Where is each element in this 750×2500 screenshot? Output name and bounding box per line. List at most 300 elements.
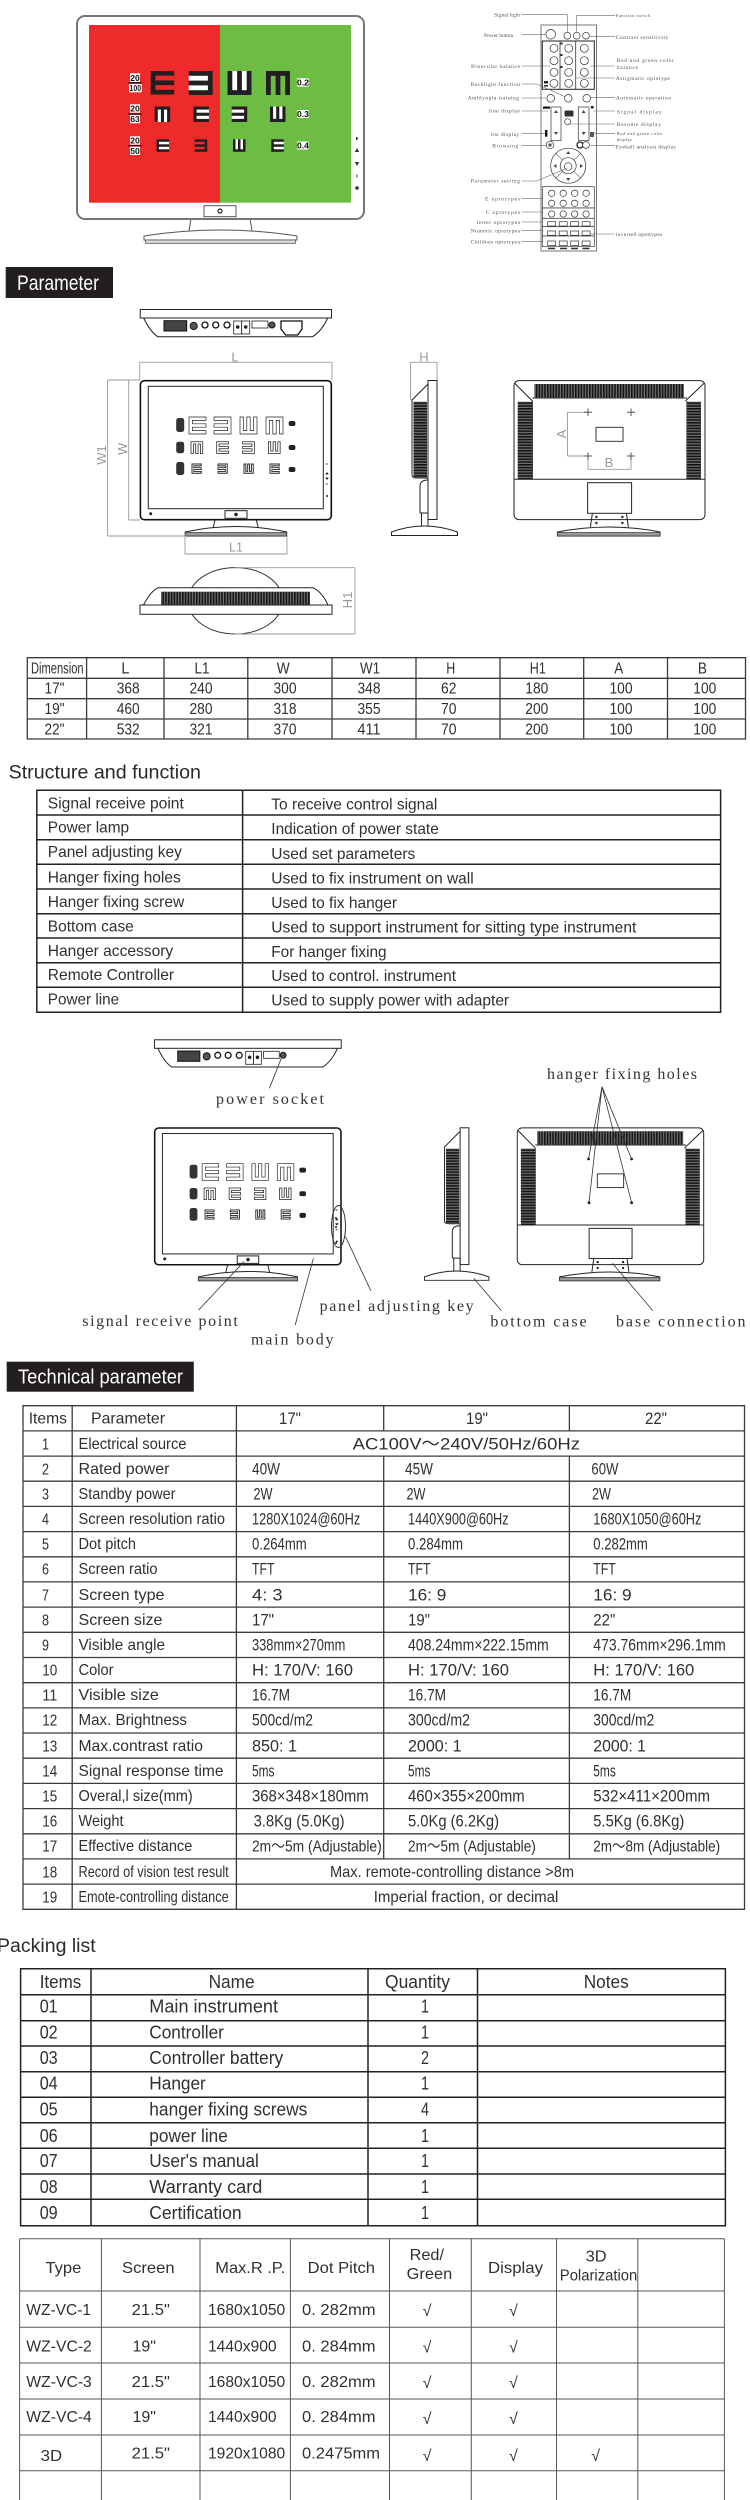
row 22 inch: 321	[190, 722, 213, 738]
structure names: Bottom case	[48, 918, 134, 936]
row 22 inch: 532	[117, 722, 140, 738]
dimension line: H1	[235, 568, 355, 634]
model table header: Max.R .P.	[215, 2260, 285, 2277]
row 19 inch: 460	[117, 701, 140, 718]
dimension line: H	[410, 350, 437, 400]
item numbers: 16	[42, 1814, 57, 1830]
19 inch values: TFT	[408, 1560, 430, 1578]
dimension lines: L W W1 L1: L1	[229, 540, 243, 554]
dimension lines: L W W1 L1: W1	[94, 445, 109, 465]
packing item names: power line	[149, 2126, 228, 2146]
leader lines for structure labels	[199, 1058, 653, 1325]
structure names: Signal receive point	[48, 796, 184, 812]
drawing: structure side view	[424, 1128, 489, 1280]
item numbers: 3	[42, 1486, 49, 1504]
check marks: √	[423, 2303, 432, 2320]
section tag: Technical parameter: Technical parameter	[18, 1366, 183, 1388]
packing quantities: 4	[421, 2100, 429, 2120]
parameter names	[78, 1436, 229, 1906]
table header row: W1	[360, 660, 380, 678]
item numbers: 1	[42, 1436, 49, 1454]
parameter names: Weight	[78, 1813, 124, 1830]
check marks: √	[423, 2375, 432, 2392]
drawing: structure rear port view	[154, 1040, 341, 1067]
decimal labels: 0.3	[297, 109, 309, 119]
17 inch values: 2W	[254, 1484, 272, 1504]
row 22 inch: 200	[525, 722, 548, 738]
packing item names: Warranty card	[149, 2177, 262, 2197]
function descriptions: To receive control signal	[271, 796, 437, 814]
row 22 inch: 370	[274, 722, 297, 738]
17 inch values	[252, 1460, 382, 1856]
function descriptions	[271, 796, 637, 1010]
function descriptions: Used to control. instrument	[271, 968, 457, 985]
row 17 inch: 300	[274, 680, 297, 698]
remote left labels: Browsing	[492, 144, 519, 150]
item numbers: 8	[42, 1612, 49, 1630]
label: bottom case: bottom case	[490, 1314, 587, 1331]
model table header: Green	[407, 2266, 452, 2283]
model table header	[46, 2247, 637, 2284]
row 17 inch: 100	[693, 680, 716, 698]
structure names: Panel adjusting key	[48, 844, 182, 861]
section tag: Parameter: Parameter	[17, 272, 99, 295]
model rows: 1920x1080	[208, 2446, 285, 2462]
row 19 inch: 19"	[44, 701, 64, 718]
packing item numbers: 07	[40, 2151, 58, 2171]
17 inch values: 850: 1	[252, 1736, 297, 1756]
17 inch values: 338mm×270mm	[252, 1636, 345, 1654]
row 17 inch: 17"	[44, 680, 64, 698]
function descriptions: Used to supply power with adapter	[271, 992, 510, 1010]
check marks: √	[509, 2340, 518, 2356]
function descriptions: For hanger fixing	[271, 944, 387, 961]
optotype row one	[151, 71, 290, 95]
item numbers: 14	[42, 1764, 57, 1780]
model rows	[26, 2302, 380, 2465]
17 inch values: 16.7M	[252, 1686, 290, 1704]
packing quantities	[421, 1997, 429, 2223]
item numbers: 2	[42, 1462, 49, 1478]
remote left labels: Power button	[484, 33, 514, 39]
row 19 inch: 318	[274, 701, 297, 718]
dimension lines: L W W1 L1	[94, 350, 332, 554]
power indicator box	[204, 206, 236, 217]
table header row: W	[277, 660, 291, 678]
remote left labels: Numeric optotypes	[471, 228, 520, 234]
17 inch values: 368×348×180mm	[252, 1786, 369, 1806]
22 inch values: 1680X1050@60Hz	[593, 1510, 701, 1528]
item numbers: 12	[42, 1712, 57, 1730]
item numbers: 17	[42, 1838, 57, 1856]
structure names: Hanger fixing holes	[48, 870, 181, 886]
17 inch values: 17"	[252, 1610, 274, 1630]
remote left labels: Parameter setting	[471, 179, 520, 185]
function descriptions: Used set parameters	[271, 846, 415, 863]
remote left labels: Backlight function	[471, 81, 520, 88]
model table header: Red/	[410, 2247, 445, 2264]
model rows: 1440x900	[208, 2409, 277, 2426]
decimal labels: 0.2	[297, 78, 309, 88]
parameter names: Record of vision test result	[78, 1864, 229, 1881]
fraction labels: 20	[130, 136, 140, 146]
model rows: 21.5"	[132, 2374, 170, 2391]
parameter names: Emote-controlling distance	[78, 1889, 229, 1906]
22 inch values: 2W	[592, 1484, 611, 1504]
remote right labels	[616, 13, 676, 238]
packing item names: Controller	[149, 2023, 224, 2043]
drawing: dimensions front view	[140, 381, 331, 536]
17 inch values: 1280X1024@60Hz	[252, 1510, 360, 1528]
row 17 inch: 62	[441, 680, 457, 698]
remote left labels: letter optotypes	[477, 220, 520, 226]
fraction labels: 20	[130, 104, 140, 114]
19 inch values: 408.24mm×222.15mm	[408, 1636, 549, 1654]
label: base connection: base connection	[616, 1314, 746, 1331]
row 19 inch: 100	[610, 701, 633, 718]
remote right labels: Red and green color	[617, 131, 663, 136]
row 19 inch: 355	[358, 701, 381, 718]
monitor stand	[144, 218, 297, 243]
header row: 19"	[466, 1409, 488, 1428]
22 inch values: 22"	[593, 1610, 615, 1630]
19 inch values: 16.7M	[408, 1686, 446, 1704]
packing quantities: 1	[421, 2203, 429, 2223]
drawing: structure back view	[517, 1128, 704, 1281]
dimension lines: L W W1 L1: L	[231, 350, 239, 364]
item numbers: 18	[42, 1864, 57, 1882]
table header row: L	[121, 660, 129, 678]
drawing: dimensions side view	[392, 380, 458, 536]
model rows: WZ-VC-4	[26, 2409, 92, 2426]
row 19 inch	[44, 701, 716, 718]
check marks: √	[509, 2375, 518, 2392]
model rows: 21.5"	[132, 2302, 170, 2319]
19 inch values: 5.0Kg (6.2Kg)	[408, 1812, 499, 1830]
label: signal receive point: signal receive point	[82, 1313, 238, 1330]
parameter names: Rated power	[78, 1461, 170, 1478]
packing item numbers: 09	[40, 2203, 58, 2223]
remote right labels: Red and green color	[617, 58, 674, 64]
packing quantities: 1	[421, 2177, 429, 2197]
22 inch values	[591, 1460, 726, 1856]
row 17 inch: 348	[358, 680, 381, 698]
row 17 inch: 240	[190, 680, 213, 698]
parameter names: Visible size	[78, 1687, 159, 1704]
row 17 inch: 180	[525, 680, 548, 698]
check marks: √	[423, 2340, 432, 2356]
parameter names: Max.contrast ratio	[78, 1738, 203, 1755]
row 17 inch: 100	[610, 680, 633, 698]
table header row: B	[698, 660, 707, 678]
remote right labels: Eyeball analysis display	[616, 144, 676, 150]
table header row: A	[614, 660, 623, 678]
remote left labels: E optotypes	[485, 196, 520, 202]
section tag: Parameter	[6, 267, 113, 298]
item numbers	[42, 1436, 57, 1906]
model rows: 1680x1050	[208, 2302, 285, 2319]
parameter names: Color	[78, 1662, 114, 1679]
19 inch values: 16: 9	[408, 1586, 446, 1604]
remote left labels: C optotypes	[486, 210, 520, 216]
17 inch values: H: 170/V: 160	[252, 1660, 353, 1680]
item numbers: 13	[42, 1738, 57, 1756]
function descriptions: Used to support instrument for sitting type instrument	[271, 920, 637, 936]
19 inch values: 0.284mm	[408, 1534, 463, 1554]
model rows: 0. 282mm	[302, 2302, 376, 2319]
19 inch values: 2000: 1	[408, 1736, 462, 1756]
packing item names: hanger fixing screws	[149, 2100, 307, 2120]
navigation pad	[551, 148, 586, 183]
22 inch values: 60W	[591, 1460, 618, 1478]
parameter names: Screen resolution ratio	[78, 1511, 225, 1528]
drawing: dimensions back view	[514, 381, 705, 536]
table header row	[31, 660, 707, 678]
22 inch values: 2000: 1	[593, 1736, 646, 1756]
row 22 inch: 22"	[44, 722, 64, 738]
item numbers: 15	[42, 1788, 57, 1806]
19 inch values: 1440X900@60Hz	[408, 1510, 509, 1528]
model table header: Display	[488, 2260, 543, 2277]
packing item names: Certification	[149, 2203, 242, 2223]
fraction labels	[128, 73, 142, 156]
row 22 inch	[44, 722, 716, 738]
19 inch values: 19"	[408, 1610, 430, 1630]
19 inch values: 300cd/m2	[408, 1710, 470, 1730]
packing item numbers: 03	[40, 2048, 58, 2068]
item numbers: 7	[42, 1588, 49, 1604]
remote right labels: balance	[617, 65, 639, 71]
model rows: WZ-VC-2	[26, 2338, 92, 2356]
parameter names: Visible angle	[78, 1637, 165, 1654]
row 17 inch: 368	[117, 680, 140, 698]
check marks: √	[509, 2303, 518, 2320]
fraction labels: 20	[130, 73, 140, 83]
packing item names: Controller battery	[149, 2048, 283, 2068]
header row: Items	[29, 1410, 67, 1428]
structure names	[48, 796, 185, 1008]
hanger fixing hole markers	[587, 1158, 633, 1204]
parameter names: Effective distance	[78, 1838, 192, 1855]
row 17 inch	[44, 680, 716, 698]
parameter names: Signal response time	[78, 1763, 224, 1780]
row 19 inch: 280	[190, 701, 213, 718]
remote right labels: Automatic operation	[616, 95, 671, 101]
17 inch values: 40W	[252, 1460, 280, 1478]
table: packing list	[21, 1969, 725, 2226]
item numbers: 9	[42, 1638, 49, 1654]
section tag: Technical parameter	[7, 1362, 194, 1392]
table header row: H1	[530, 660, 546, 678]
remote left labels: Children optotypes	[471, 239, 520, 245]
remote right labels: Signal display	[617, 110, 662, 116]
table header row: H	[446, 660, 455, 678]
decimal labels: 0.4	[297, 140, 309, 150]
packing quantities: 1	[421, 2151, 429, 2171]
model rows: 0.2475mm	[302, 2446, 380, 2462]
structure names: Hanger accessory	[48, 943, 173, 960]
check marks: √	[423, 2448, 432, 2465]
monitor frame	[77, 16, 364, 219]
model rows: 1680x1050	[208, 2374, 285, 2391]
label: main body: main body	[251, 1331, 334, 1348]
17 inch values: 5ms	[252, 1762, 274, 1780]
drawing: dimensions rear port view	[140, 310, 332, 337]
parameter names: Screen type	[78, 1587, 165, 1604]
22 inch values: 300cd/m2	[593, 1710, 654, 1730]
packing header row: Items	[40, 1972, 81, 1992]
remote left labels: line display	[489, 109, 520, 115]
function descriptions: Indication of power state	[271, 821, 439, 838]
merged values	[330, 1434, 580, 1906]
packing item numbers: 08	[40, 2177, 58, 2197]
model table header: Type	[46, 2260, 81, 2277]
model rows: 19"	[132, 2409, 156, 2426]
22 inch values: 5ms	[593, 1762, 616, 1780]
packing quantities: 1	[421, 2023, 429, 2043]
remote right labels: Resume display	[617, 122, 661, 128]
row 22 inch: 100	[693, 722, 716, 738]
19 inch values: 2m～5m (Adjustable)	[408, 1838, 536, 1856]
22 inch values: 532×411×200mm	[593, 1786, 710, 1806]
model rows: 1440x900	[208, 2338, 277, 2356]
packing quantities: 2	[421, 2048, 429, 2068]
item numbers: 5	[42, 1536, 49, 1554]
number keypad	[542, 41, 594, 89]
17 inch values: 500cd/m2	[252, 1710, 313, 1730]
remote left labels: Binocular balance	[471, 64, 521, 70]
packing quantities: 1	[421, 1997, 429, 2017]
17 inch values: 2m～5m (Adjustable)	[252, 1838, 382, 1856]
check marks: √	[509, 2448, 518, 2465]
browse and eyeball buttons	[546, 141, 589, 149]
item numbers: 11	[42, 1688, 57, 1704]
parameter names: Max. Brightness	[78, 1712, 187, 1729]
packing item numbers: 06	[40, 2126, 58, 2146]
packing item numbers: 05	[40, 2100, 58, 2120]
remote right labels: Function switch	[616, 13, 651, 18]
parameter names: Screen ratio	[78, 1561, 158, 1578]
19 inch values: H: 170/V: 160	[408, 1660, 509, 1680]
remote right labels: display	[617, 137, 633, 142]
header row: 17"	[279, 1409, 301, 1428]
model rows: 0. 284mm	[302, 2338, 376, 2356]
check marks: √	[591, 2448, 600, 2465]
optotype button blocks	[542, 187, 594, 249]
mounting holes with A and B dimensions	[554, 408, 635, 470]
fraction labels: 100	[130, 83, 141, 93]
remote left labels: Signal light	[494, 12, 520, 18]
leader lines	[522, 15, 615, 241]
19 inch values: 2W	[406, 1484, 426, 1504]
adjustment strips	[543, 106, 594, 141]
merged values: AC100V～240V/50Hz/60Hz	[353, 1434, 580, 1454]
remote controller diagram	[468, 12, 676, 251]
parameter names: Standby power	[78, 1486, 176, 1503]
label: hanger fixing holes: hanger fixing holes	[547, 1066, 697, 1083]
19 inch values	[405, 1460, 549, 1856]
17 inch values: 3.8Kg (5.0Kg)	[254, 1812, 345, 1830]
merged values: Imperial fraction, or decimal	[374, 1889, 558, 1906]
22 inch values: 2m～8m (Adjustable)	[593, 1838, 720, 1856]
structure names: Hanger fixing screw	[48, 894, 185, 911]
packing header row: Quantity	[385, 1972, 450, 1992]
packing item numbers: 01	[40, 1997, 58, 2017]
row 19 inch: 70	[441, 701, 457, 718]
remote left labels: list display	[491, 132, 520, 138]
packing item numbers	[40, 1997, 58, 2223]
17 inch values: 0.264mm	[252, 1534, 307, 1554]
check marks	[423, 2303, 600, 2465]
header row	[29, 1409, 667, 1428]
packing item names: Main instrument	[149, 1997, 278, 2017]
row 19 inch: 100	[693, 701, 716, 718]
packing quantities: 1	[421, 2126, 429, 2146]
icon: power socket	[281, 321, 302, 335]
packing item numbers: 02	[40, 2023, 58, 2043]
22 inch values: 0.282mm	[593, 1534, 648, 1554]
22 inch values: 16: 9	[593, 1586, 632, 1604]
row 19 inch: 200	[525, 701, 548, 718]
dimension lines: L W W1 L1: W	[115, 442, 130, 455]
table header row: L1	[194, 660, 210, 678]
remote left labels: Amblyopia training	[468, 96, 519, 102]
remote right labels: inverted optotypes	[616, 232, 662, 238]
structure names: Power lamp	[48, 820, 129, 836]
model rows: 21.5"	[132, 2446, 170, 2462]
function descriptions: Used to fix instrument on wall	[271, 870, 474, 888]
decimal labels	[297, 78, 309, 150]
17 inch values: 4: 3	[252, 1586, 283, 1604]
mounting holes with A and B dimensions: B	[605, 455, 613, 470]
front panel keys	[355, 137, 359, 190]
parameter names: Screen size	[78, 1612, 163, 1629]
packing item numbers: 04	[40, 2074, 58, 2094]
packing item names: User's manual	[149, 2151, 259, 2171]
item numbers: 10	[42, 1662, 57, 1680]
19 inch values: 45W	[405, 1460, 433, 1478]
table: technical parameters	[23, 1406, 744, 1909]
remote right labels: Contrast sensitivity	[616, 35, 669, 41]
label: panel adjusting key: panel adjusting key	[320, 1298, 474, 1315]
table: structure and function	[37, 790, 721, 1012]
optotype row three	[156, 139, 284, 152]
panel key highlight oval	[332, 1206, 346, 1248]
structure names: Power line	[48, 992, 119, 1008]
model rows: 19"	[132, 2338, 156, 2356]
19 inch values: 5ms	[408, 1762, 430, 1780]
mounting holes with A and B dimensions: A	[554, 429, 569, 438]
17 inch values: TFT	[252, 1560, 274, 1578]
model rows: 0. 282mm	[302, 2374, 376, 2391]
structure names: Remote Controller	[48, 967, 175, 984]
22 inch values: H: 170/V: 160	[593, 1660, 694, 1680]
red half of screen	[89, 25, 220, 203]
packing item names: Hanger	[149, 2074, 206, 2094]
item numbers: 4	[42, 1512, 49, 1528]
merged values: Max. remote-controlling distance >8m	[330, 1864, 574, 1881]
packing quantities: 1	[421, 2074, 429, 2094]
19 inch values: 460×355×200mm	[408, 1786, 525, 1806]
dimension line: H1: H1	[340, 592, 355, 608]
drawing: dimensions top view with base	[140, 568, 355, 634]
row 22 inch: 70	[441, 722, 457, 738]
22 inch values: TFT	[593, 1560, 616, 1578]
model table header: Dot Pitch	[308, 2260, 375, 2277]
parameter names: Dot pitch	[78, 1536, 136, 1553]
table: product models	[20, 2239, 724, 2500]
fraction labels: 63	[130, 114, 140, 124]
